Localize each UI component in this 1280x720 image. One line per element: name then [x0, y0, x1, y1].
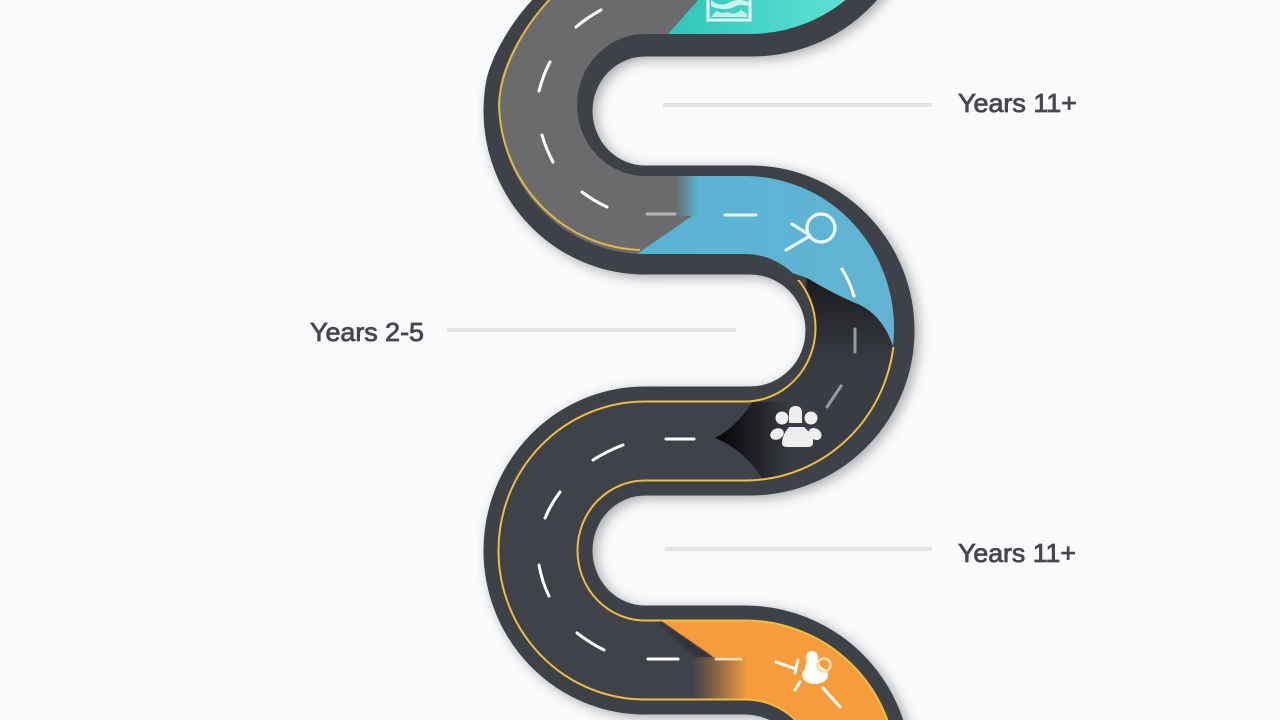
- icon: figure on orange: [776, 651, 840, 707]
- orange fade from asphalt: [690, 657, 746, 698]
- segment: dark asphalt base: [450, 0, 950, 720]
- label: middle: Years 2-5: [310, 317, 424, 347]
- diagonal shadow at orange edge: [662, 622, 714, 658]
- connector line: bottom label: [665, 547, 932, 551]
- segment: gray fade into blue: [676, 176, 696, 216]
- icon: framed picture on teal: [708, 0, 750, 20]
- icon: magnifier on blue: [786, 214, 835, 250]
- segment: gray stage left bend: [500, 0, 698, 100]
- connector line: top label: [663, 103, 932, 107]
- road surface segments: [500, 0, 894, 720]
- label: top: Years 11+: [958, 88, 1077, 118]
- segment: teal stage: [668, 0, 846, 34]
- centre dashes: [539, 10, 855, 659]
- yellow edge line on gray segment: [499, 0, 640, 250]
- road outer border: [538, 0, 864, 720]
- segment: blue stage: [637, 176, 894, 346]
- segment: orange stage: [662, 622, 886, 720]
- segment: gray stage lower bend: [554, 176, 692, 254]
- icon: people group: [768, 406, 824, 447]
- connector line: middle label: [447, 328, 736, 332]
- fold shadow at tip: [715, 402, 782, 478]
- road top-left corner trim: [470, 0, 537, 80]
- road timeline infographic: [310, 0, 1076, 720]
- segment: dark stage after blue: [807, 278, 893, 347]
- fold shadow under blue: [806, 278, 892, 344]
- yellow edge lines: [498, 280, 894, 720]
- label: bottom: Years 11+: [958, 538, 1076, 568]
- road drop shadow: [542, 0, 868, 720]
- road top-left border band: [486, 0, 554, 80]
